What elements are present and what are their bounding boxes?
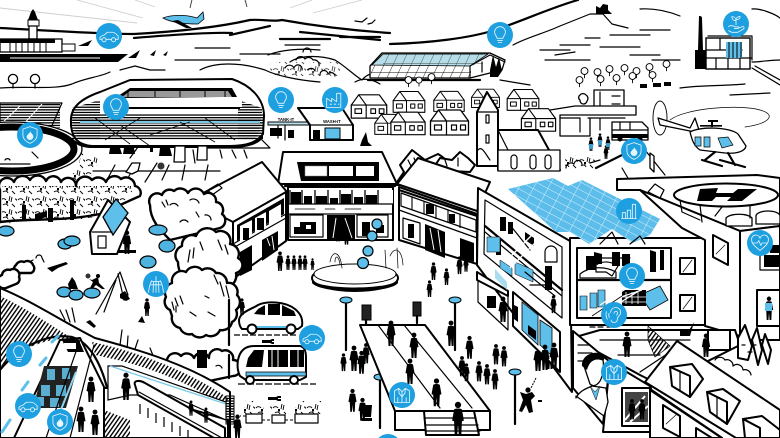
icon: car, airport (96, 23, 122, 49)
tank-it and wash-it stations: WASH-IT (323, 119, 341, 124)
icon: jacket, clinic (601, 359, 627, 385)
fountain (312, 219, 403, 291)
mountains (0, 0, 780, 60)
icon: heart, hospital (747, 230, 773, 256)
clinic with doctor billboard (573, 331, 651, 432)
meadow figures and swing (29, 255, 150, 323)
icon: ear (601, 302, 627, 328)
racetrack with solar field (0, 103, 100, 195)
playhouse with solar roof (90, 199, 136, 254)
hillside bushes (395, 150, 665, 185)
icon: shield, racetrack (17, 122, 43, 148)
icon: shield, fire station (621, 138, 647, 164)
underpass tunnel with hatched embankment (0, 288, 242, 438)
greenhouse (368, 53, 505, 80)
left shop building (190, 162, 287, 276)
main glass office building (477, 188, 705, 392)
icon: jacket, platform (389, 382, 415, 408)
icon: factory (322, 87, 348, 113)
house with dormers in foreground (645, 341, 780, 438)
central building (278, 152, 397, 245)
icon: bar chart, solar roof (616, 198, 642, 224)
sheep flock (0, 225, 175, 300)
pavement kerb beside trees (228, 300, 230, 378)
electric bus (238, 346, 316, 401)
icon: shield, tunnel (47, 409, 73, 435)
plaza lamps and sign (340, 297, 521, 428)
airport terminal and tower (0, 9, 168, 62)
rooftop terrace with tennis court (572, 322, 771, 385)
right-hand hospital building (640, 184, 780, 340)
icon: car, charging bay (299, 325, 325, 351)
icon: car, tunnel (15, 393, 41, 419)
icon: partial bottom marker (379, 434, 397, 438)
right shop building (397, 158, 490, 264)
power plant (695, 16, 780, 85)
flower planters (240, 401, 321, 423)
birds (355, 18, 375, 24)
distant fields and hedges (0, 48, 395, 88)
plaza crowd (340, 321, 554, 421)
park edge with grass (60, 308, 154, 358)
icon: bulb, stadium (103, 94, 129, 120)
solar panels on the roof (508, 178, 660, 244)
upper roof of the right-hand block (617, 175, 780, 231)
helicopter (653, 101, 769, 167)
icon: bulb, office (619, 263, 645, 289)
church (477, 92, 560, 171)
parking lot (93, 140, 270, 182)
raised pedestrian platform (360, 321, 490, 435)
sky rays (0, 0, 362, 23)
village houses (351, 89, 556, 135)
electric car (234, 298, 302, 344)
icon: bulb, tunnel (6, 341, 32, 367)
orchard trees (405, 61, 770, 95)
crowd at back of plaza (277, 251, 469, 297)
tank-it and wash-it stations: TANK-IT (278, 117, 295, 122)
stadium (71, 79, 264, 148)
airplane (163, 12, 204, 28)
tank-it and wash-it stations (268, 108, 372, 146)
icon: crop field (143, 271, 169, 297)
icon: bulb, hills (487, 22, 513, 48)
fire station and fire engine (550, 90, 648, 159)
icon: bulb, filling station (268, 87, 294, 113)
icon: plant in hand (723, 11, 749, 37)
trees around playground (0, 176, 242, 385)
office window with interior (577, 248, 695, 327)
